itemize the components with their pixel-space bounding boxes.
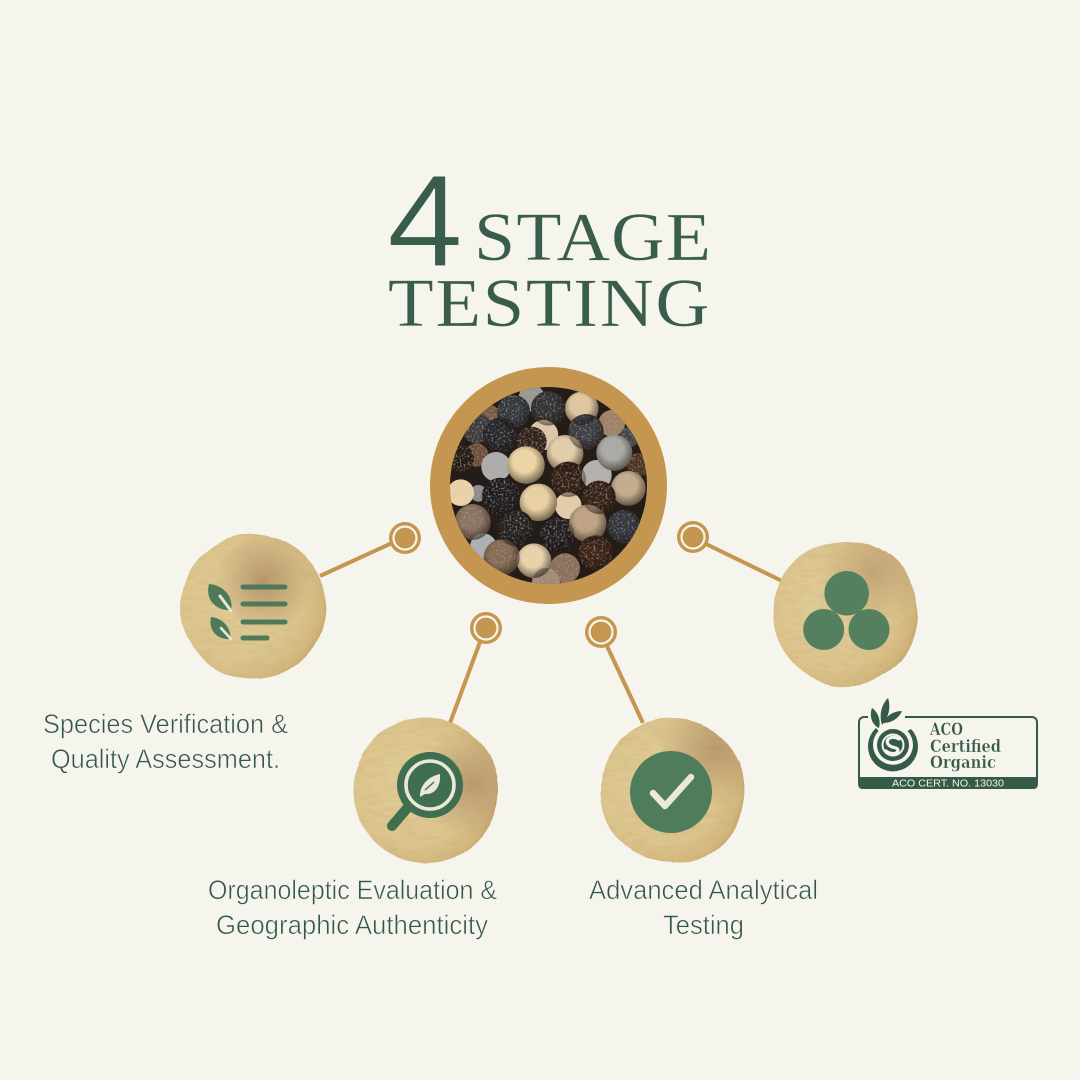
connector: stage 2	[450, 612, 502, 723]
stage 3 badge	[600, 718, 745, 863]
label: stage 2: Geographic Authenticity	[216, 910, 488, 940]
logo wordmark: ACO	[929, 720, 963, 739]
ACO certified organic logo	[858, 698, 1038, 790]
stage 2 badge	[354, 718, 498, 863]
stage 4 badge	[773, 541, 918, 686]
label: stage 3	[589, 875, 818, 940]
certificate number: ACO CERT. NO. 13030	[892, 778, 1004, 790]
logo wordmark: Organic	[930, 753, 996, 772]
label: stage 1: Quality Assessment.	[51, 744, 280, 774]
title word STAGE: STAGE	[474, 199, 712, 275]
label: stage 1: Species Verification &	[43, 709, 288, 739]
icon: check mark	[630, 751, 712, 833]
label: stage 2	[208, 875, 497, 940]
watercolor disc	[773, 541, 918, 686]
icon: leaf checklist	[208, 584, 285, 639]
label: stage 3: Testing	[663, 910, 744, 940]
icon: three circles	[803, 571, 890, 650]
watercolor disc	[600, 718, 745, 863]
logo leaves	[871, 698, 902, 728]
label: stage 2: Organoleptic Evaluation &	[208, 875, 497, 905]
logo wordmark: Certified	[930, 737, 1001, 756]
central peppercorn photo with gold ring	[440, 377, 660, 596]
icon: magnifier with leaf	[392, 752, 463, 826]
title numeral 4: 4	[387, 147, 463, 294]
stage 1 badge	[181, 534, 326, 679]
label: stage 3: Advanced Analytical	[589, 875, 818, 905]
watercolor disc	[354, 718, 498, 863]
connector: stage 4	[677, 521, 782, 581]
logo wordmark	[929, 720, 1001, 772]
title word TESTING: TESTING	[388, 265, 711, 341]
connector: stage 1	[320, 522, 421, 576]
label: stage 1	[43, 709, 288, 774]
connector: stage 3	[585, 616, 643, 723]
logo swirl	[868, 728, 918, 771]
title	[387, 147, 712, 341]
watercolor disc	[181, 534, 326, 679]
